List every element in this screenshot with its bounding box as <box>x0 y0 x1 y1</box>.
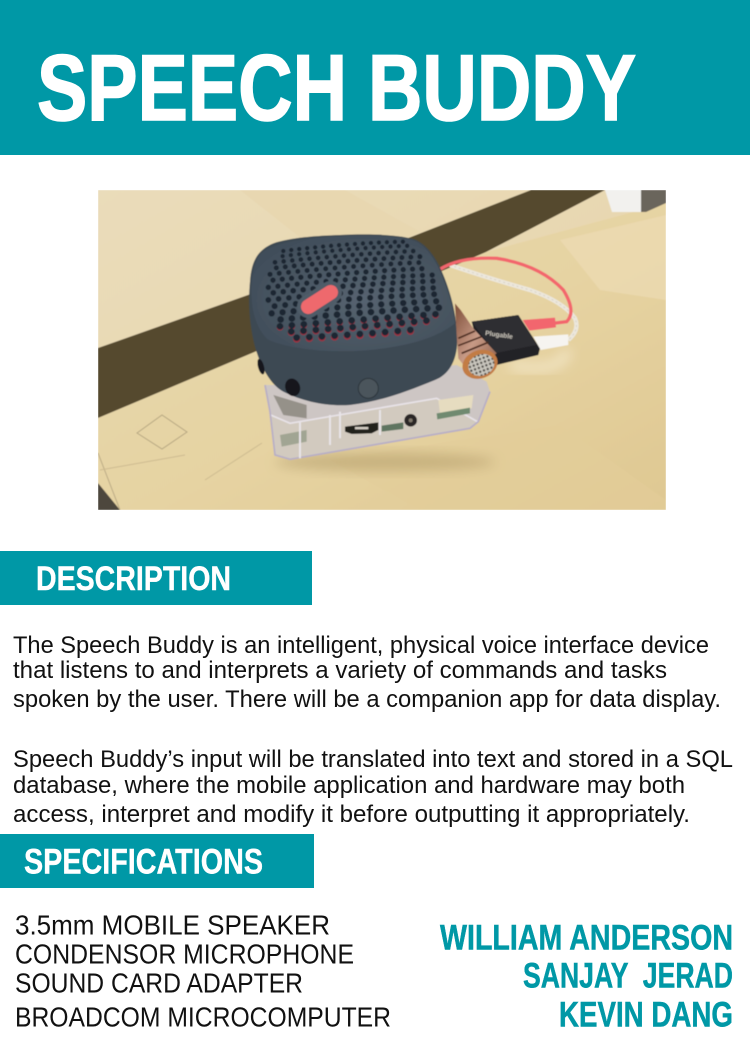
speaker body <box>249 234 457 405</box>
white plug <box>533 334 568 350</box>
lower wood surface <box>98 203 666 510</box>
clear raspberry pi case <box>265 365 490 459</box>
text block: description <box>13 632 733 828</box>
dark gap in the bench <box>98 190 605 418</box>
shadows <box>275 453 495 471</box>
board parts behind the case <box>273 395 307 418</box>
text block: description: access, interpret and modify it before outputting it appropriately. <box>13 801 690 828</box>
text block: description: spoken by the user. There will be a companion app for data display. <box>13 686 721 713</box>
photo: speech buddy device on a wooden bench <box>98 190 666 510</box>
pencil diamond mark <box>137 415 187 449</box>
pink cable <box>440 258 571 323</box>
white braided cable <box>450 265 576 340</box>
power jack <box>404 414 417 427</box>
panel: description heading: DESCRIPTION <box>36 560 231 598</box>
text block: description: database, where the mobile application and hardware may both <box>13 772 685 799</box>
title banner <box>0 0 750 155</box>
wood bench background <box>98 190 632 348</box>
text block: description: that listens to and interprets a variety of commands and tasks <box>13 657 667 684</box>
speaker side holes <box>284 378 300 396</box>
speaker, case and microphone <box>249 234 502 459</box>
text block: specifications list: BROADCOM MICROCOMPUTER <box>15 1002 391 1032</box>
bench corner gap <box>98 483 120 510</box>
hdmi port <box>345 422 378 434</box>
copper microphone <box>454 303 498 380</box>
text block: description: The Speech Buddy is an intelligent, physical voice interface device <box>13 632 709 659</box>
dongle <box>472 315 540 365</box>
sound card dongle and cables <box>440 258 576 365</box>
text block: specifications list: SOUND CARD ADAPTER <box>15 968 303 998</box>
sound card dongle and cables: Plugable <box>485 330 513 341</box>
text block: specifications list: CONDENSOR MICROPHONE <box>15 938 354 970</box>
pink button <box>308 292 331 307</box>
white box and dark corner <box>605 190 641 212</box>
text block: team names <box>440 918 733 1034</box>
panel: description heading <box>0 551 312 605</box>
panel: specifications heading <box>0 834 314 888</box>
grille holes <box>268 242 442 339</box>
text block: description: Speech Buddy’s input will be translated into text and stored in a SQL <box>13 746 733 773</box>
text block: specifications list <box>15 910 391 1032</box>
text block: specifications list: 3.5mm MOBILE SPEAKER <box>15 910 330 940</box>
speaker grille face <box>251 236 455 351</box>
pink plug <box>523 318 556 331</box>
panel: specifications heading: SPECIFICATIONS <box>24 842 263 882</box>
